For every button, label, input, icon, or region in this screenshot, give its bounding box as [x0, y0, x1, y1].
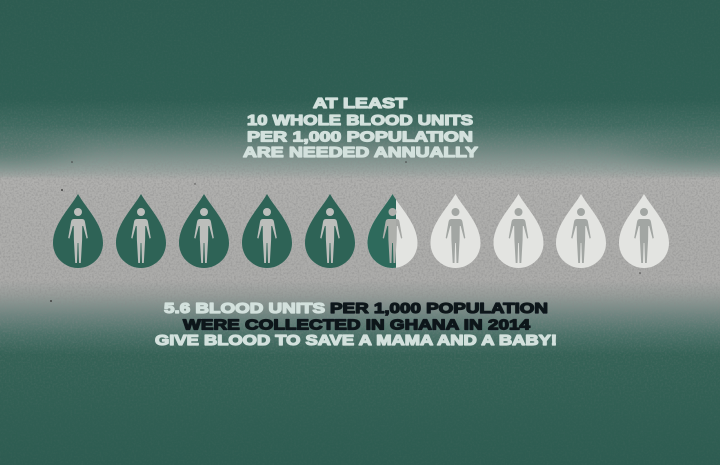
heading: annual need: 10 WHOLE BLOOD UNITS [247, 112, 473, 129]
infographic [0, 97, 720, 430]
text block: collection figures and call to action: WERE COLLECTED IN GHANA IN 2014 [183, 316, 531, 334]
text block: collection figures and call to action: 5.6 BLOOD UNITS [164, 300, 325, 317]
text block: collection figures and call to action: GIVE BLOOD TO SAVE A MAMA AND A BABY! [155, 332, 557, 349]
heading: annual need: PER 1,000 POPULATION [247, 128, 473, 146]
pictogram row: 5.6 of 10 blood drops filled [53, 194, 669, 268]
icon: partially filled drop 6 [368, 194, 418, 268]
icon: filled drop 4 [242, 194, 292, 268]
icon: empty drop 7 [430, 194, 480, 268]
icon: empty drop 10 [619, 194, 669, 268]
heading: annual need [243, 95, 478, 161]
icon: empty drop 8 [494, 194, 544, 268]
icon: filled drop 1 [53, 194, 103, 268]
text block: collection figures and call to action [155, 300, 557, 349]
text block: collection figures and call to action: PER 1,000 POPULATION [330, 300, 548, 317]
icon: filled drop 2 [116, 194, 166, 268]
icon: empty drop 9 [556, 194, 606, 268]
heading: annual need: AT LEAST [313, 95, 407, 112]
heading: annual need: ARE NEEDED ANNUALLY [243, 144, 478, 161]
icon: filled drop 5 [305, 194, 355, 268]
icon: filled drop 3 [179, 194, 229, 268]
